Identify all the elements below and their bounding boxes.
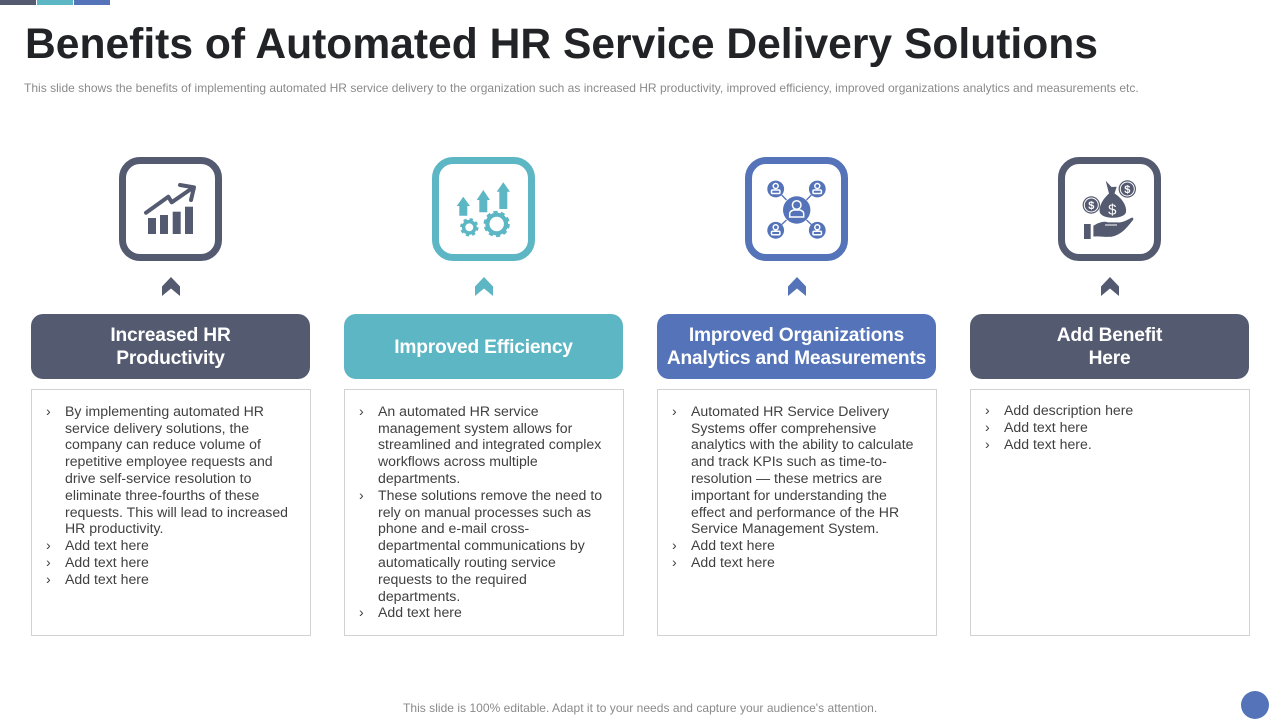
arrow: chevron up 2 [475,277,493,296]
icon: people network [745,157,848,261]
panel: increased HR productivity text: eliminate three-fourths of these [65,487,259,503]
panel: improved efficiency text: automatically routing service [378,554,556,570]
panel: increased HR productivity text: HR productivity. [65,520,163,536]
panel: improved analytics text: Add text here [691,537,775,553]
icon: arrows and gears [432,157,535,261]
panel: add benefit text: Add description here [1004,402,1133,418]
panel: increased HR productivity text: company can reduce volume of [65,436,261,452]
panel: improved efficiency text: These solutions remove the need to [378,487,602,503]
heading: improved organizations analytics: Analytics and Measurements [667,348,926,369]
icon: money bag in hand: $ [1088,200,1094,212]
panel: increased HR productivity text: drive self-service resolution to [65,470,251,486]
footer note: This slide is 100% editable. Adapt it to your needs and capture your audience's attention. [403,701,877,715]
heading: add benefit [970,314,1249,379]
panel: increased HR productivity text: repetitive employee requests and [65,453,273,469]
heading: increased HR productivity [31,314,310,379]
heading: increased HR productivity: Increased HR [110,325,231,346]
panel: improved efficiency text: management system allows for [378,420,572,436]
panel: add benefit text: Add text here. [1004,436,1092,452]
panel: add benefit text: Add text here [1004,419,1088,435]
panel: improved analytics text: resolution — these metrics are [691,470,882,486]
panel: increased HR productivity text: Add text here [65,537,149,553]
arrow: chevron up 4 [1101,277,1119,296]
panel: increased HR productivity text [31,389,311,636]
heading: improved efficiency [344,314,623,379]
heading: improved organizations analytics: Improved Organizations [689,325,904,346]
panel: add benefit text [970,389,1250,636]
icon: money bag in hand: $ [1108,201,1117,218]
heading: improved efficiency: Improved Efficiency [394,336,573,358]
panel: increased HR productivity text: requests. This will lead to increased [65,504,288,520]
panel: improved analytics text: and track KPIs such as time-to- [691,453,887,469]
page marker circle [1241,691,1269,719]
panel: improved analytics text [657,389,937,636]
panel: increased HR productivity text: Add text here [65,571,149,587]
title: Benefits of Automated HR Service Delivery Solutions [25,20,1098,68]
panel: improved analytics text: Automated HR Service Delivery [691,403,889,419]
panel: improved analytics text: Systems offer comprehensive [691,420,876,436]
panel: increased HR productivity text: service delivery solutions, the [65,420,249,436]
panel: improved analytics text: Add text here [691,554,775,570]
panel: increased HR productivity text: By implementing automated HR [65,403,264,419]
panel: improved efficiency text: departmental communications by [378,537,585,553]
icon: growth chart [119,157,222,261]
panel: improved efficiency text: departments. [378,470,460,486]
arrow: chevron up 3 [788,277,806,296]
heading: increased HR productivity: Productivity [116,348,225,369]
icon: money bag in hand [1058,157,1161,261]
panel: improved analytics text: analytics with the ability to calculate [691,436,913,452]
panel: improved efficiency text: Add text here [378,604,462,620]
top accent bars [0,0,110,5]
panel: increased HR productivity text: Add text here [65,554,149,570]
icon: money bag in hand: $ [1124,184,1130,196]
panel: improved analytics text: effect and performance of the HR [691,504,899,520]
panel: improved efficiency text: streamlined and integrated complex [378,436,601,452]
arrow: chevron up 1 [162,277,180,296]
subtitle: This slide shows the benefits of implementing automated HR service delivery to the organization such as increased HR productivity, improved efficiency, improved organizations analytics and measurements etc. [24,81,1139,95]
panel: improved efficiency text: workflows across multiple [378,453,538,469]
panel: improved analytics text: Service Management System. [691,520,879,536]
panel: improved efficiency text [344,389,624,636]
panel: improved efficiency text: rely on manual processes such as [378,504,591,520]
panel: improved efficiency text: departments. [378,588,460,604]
panel: improved efficiency text: phone and e-mail cross- [378,520,529,536]
panel: improved analytics text: important for understanding the [691,487,887,503]
panel: improved efficiency text: requests to the required [378,571,527,587]
heading: add benefit: Here [1089,348,1130,369]
heading: improved organizations analytics [657,314,936,379]
heading: add benefit: Add Benefit [1057,325,1162,346]
panel: improved efficiency text: An automated HR service [378,403,539,419]
